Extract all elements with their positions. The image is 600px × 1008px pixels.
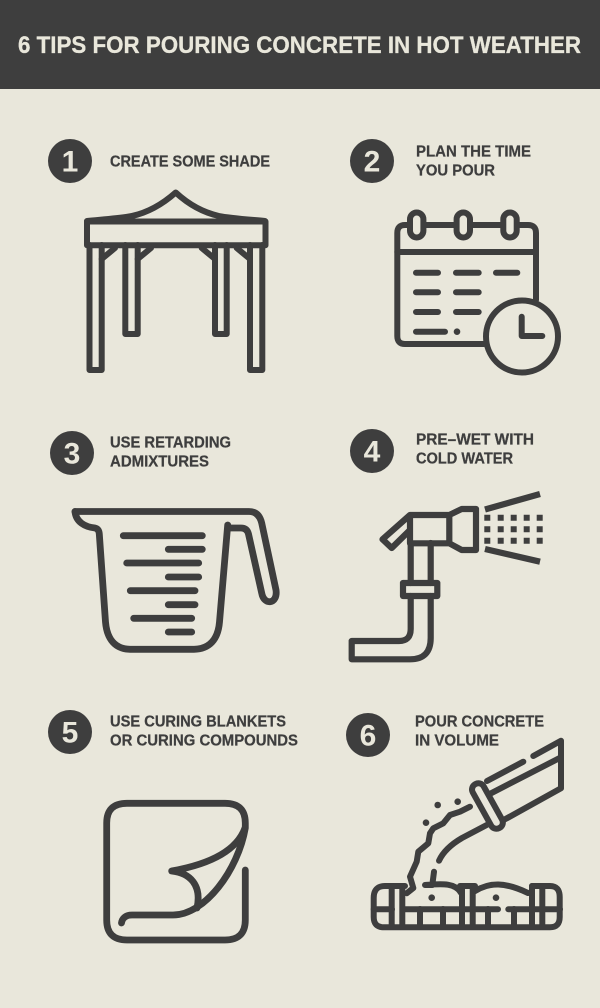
panel: tip 3 retarding admixtures [50, 431, 276, 649]
label: use curing blankets or curing compounds [110, 714, 298, 750]
header banner [0, 0, 600, 89]
label: plan the time you pour [416, 144, 531, 180]
icon: canopy tent [87, 192, 266, 370]
number badge 6 [346, 713, 390, 757]
label: pour concrete in volume: IN VOLUME [415, 732, 499, 750]
spray droplets [484, 515, 543, 544]
label: use curing blankets or curing compounds: USE CURING BLANKETS [110, 714, 286, 730]
icon: calendar with clock [397, 212, 558, 372]
label: use retarding admixtures [110, 434, 231, 470]
number badge 5: 5 [62, 716, 78, 750]
number badge 3 [50, 431, 94, 475]
number badge 1 [48, 139, 92, 183]
number badge 3: 3 [64, 438, 80, 470]
label: use retarding admixtures: USE RETARDING [110, 434, 231, 452]
panel: tip 1 create some shade [48, 139, 270, 370]
number badge 6: 6 [360, 720, 376, 752]
panel: tip 6 pour concrete in volume [346, 713, 561, 927]
label: create some shade: CREATE SOME SHADE [110, 154, 270, 170]
number badge 2: 2 [364, 146, 380, 178]
label: plan the time you pour: YOU POUR [416, 162, 495, 180]
icon: hose nozzle with spray [352, 494, 543, 659]
icon: concrete pouring into formwork [374, 741, 561, 927]
label: plan the time you pour: PLAN THE TIME [416, 144, 531, 160]
panel: tip 2 plan the time [350, 139, 558, 372]
number badge 2 [350, 139, 394, 183]
panel: tip 4 pre-wet with cold water [350, 429, 543, 659]
icon: curling blanket [107, 803, 245, 940]
icon: measuring cup [75, 512, 276, 649]
label: use retarding admixtures: ADMIXTURES [110, 454, 209, 470]
label: pre-wet with cold water: PRE–WET WITH [416, 432, 534, 448]
number badge 5 [48, 710, 92, 754]
number badge 4 [350, 429, 394, 473]
number badge 1: 1 [62, 146, 78, 178]
label: pre-wet with cold water [416, 432, 534, 468]
panel: tip 5 curing blankets [48, 710, 298, 940]
label: pour concrete in volume: POUR CONCRETE [415, 714, 544, 730]
label: use curing blankets or curing compounds: OR CURING COMPOUNDS [110, 732, 298, 750]
label: pour concrete in volume [415, 714, 544, 750]
label: pre-wet with cold water: COLD WATER [416, 450, 513, 468]
number badge 4: 4 [364, 436, 381, 468]
